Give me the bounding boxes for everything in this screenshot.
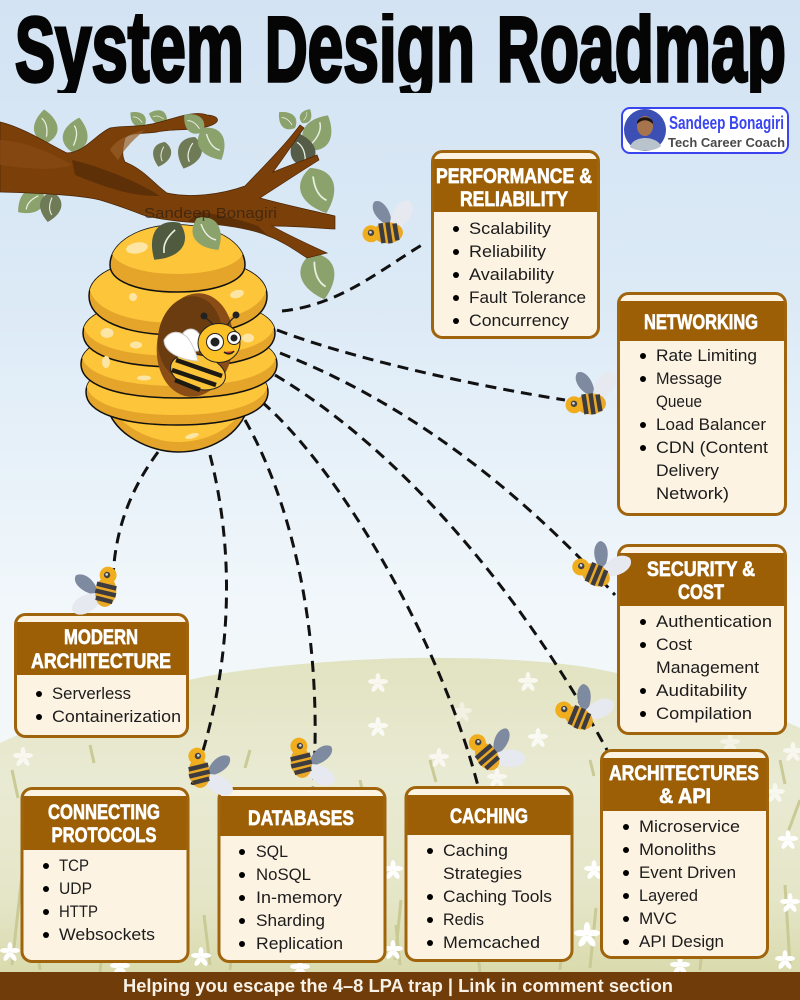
dashed path: caching bbox=[262, 402, 478, 786]
hive entrance bbox=[150, 288, 240, 402]
panel: security & cost: Authentication bbox=[656, 612, 772, 631]
panel: databases: In-memory bbox=[256, 888, 343, 907]
panel: security & cost: Auditability bbox=[656, 681, 748, 700]
bee: modern architecture bbox=[70, 562, 120, 619]
panel: databases: SQL bbox=[256, 842, 288, 861]
panel: performance & reliability: PERFORMANCE & bbox=[436, 165, 592, 188]
panel: security & cost: Management bbox=[656, 658, 759, 677]
panel: architectures & api: MVC bbox=[639, 909, 677, 928]
panel: architectures & api: Layered bbox=[639, 886, 698, 905]
panel: networking: CDN (Content bbox=[656, 438, 768, 457]
bee: caching bbox=[464, 717, 529, 784]
panel: modern architecture: ARCHITECTURE bbox=[31, 650, 171, 673]
panel: performance & reliability: Concurrency bbox=[469, 311, 570, 330]
bee: performance bbox=[361, 199, 415, 245]
panel: networking: NETWORKING bbox=[644, 311, 758, 334]
panel: networking: Delivery bbox=[656, 461, 720, 480]
panel: security & cost: COST bbox=[678, 581, 724, 604]
dashed path: performance bbox=[282, 243, 425, 311]
panel: architectures & api: & API bbox=[659, 785, 711, 808]
badge: Sandeep Bonagiri bbox=[622, 108, 788, 153]
panel: architectures & api: Microservice bbox=[639, 817, 740, 836]
panel: caching: Caching Tools bbox=[443, 887, 552, 906]
panel: caching bbox=[406, 788, 572, 960]
panel: caching: Redis bbox=[443, 910, 484, 929]
panel: connecting protocols: Websockets bbox=[59, 925, 155, 944]
panel: security & cost: SECURITY & bbox=[647, 558, 755, 581]
dashed path: architectures bbox=[275, 375, 607, 750]
panel: connecting protocols: CONNECTING bbox=[48, 801, 160, 824]
panel: caching: Memcached bbox=[443, 933, 540, 952]
panel: modern architecture: Containerization bbox=[52, 707, 181, 726]
panel: connecting protocols: PROTOCOLS bbox=[52, 824, 156, 847]
dashed path: protocols bbox=[190, 455, 227, 790]
panel: performance & reliability bbox=[432, 152, 598, 338]
panel: databases: Replication bbox=[256, 934, 343, 953]
big bee bbox=[164, 312, 240, 396]
bee: databases bbox=[287, 733, 337, 790]
panel: databases: DATABASES bbox=[248, 807, 354, 830]
panel: security & cost bbox=[618, 546, 786, 734]
dashed path: security bbox=[280, 353, 615, 595]
panel: connecting protocols: UDP bbox=[59, 879, 92, 898]
panel: architectures & api: Monoliths bbox=[639, 840, 716, 859]
panel: caching: CACHING bbox=[450, 805, 528, 828]
panel: networking: Load Balancer bbox=[656, 415, 766, 434]
watermark: Sandeep Bonagiri bbox=[144, 206, 277, 222]
panel: connecting protocols: TCP bbox=[59, 856, 89, 875]
tree branch bbox=[0, 113, 335, 258]
panel: performance & reliability: Availability bbox=[469, 265, 555, 284]
panel: performance & reliability: Fault Tolerance bbox=[469, 288, 586, 307]
panel: databases: Sharding bbox=[256, 911, 325, 930]
panel: databases bbox=[219, 788, 385, 962]
bee: networking bbox=[564, 370, 618, 416]
panel: caching: Strategies bbox=[443, 864, 522, 883]
panel: connecting protocols bbox=[22, 788, 188, 962]
panel: performance & reliability: Scalability bbox=[469, 219, 552, 238]
bee: security bbox=[568, 534, 634, 596]
panel: networking bbox=[618, 294, 786, 514]
leaves behind branch bbox=[11, 106, 342, 304]
panel: architectures & api: API Design bbox=[639, 932, 724, 951]
panel: architectures & api: ARCHITECTURES bbox=[609, 762, 759, 785]
panel: modern architecture: MODERN bbox=[64, 626, 138, 649]
beehive bbox=[81, 207, 277, 452]
panel: architectures & api bbox=[602, 750, 768, 958]
footer bar: Helping you escape the 4–8 LPA trap | Link in comment section bbox=[123, 976, 673, 996]
panel: networking: Message bbox=[656, 369, 722, 388]
background: hill and meadow bbox=[0, 658, 800, 1000]
panel: databases: NoSQL bbox=[256, 865, 311, 884]
bee: protocols bbox=[185, 743, 235, 800]
panel: architectures & api: Event Driven bbox=[639, 863, 736, 882]
dashed path: databases bbox=[245, 420, 315, 790]
panel: security & cost: Cost bbox=[656, 635, 692, 654]
panel: networking: Queue bbox=[656, 392, 702, 411]
panel: modern architecture: Serverless bbox=[52, 684, 131, 703]
panel: networking: Network) bbox=[656, 484, 729, 503]
panel: connecting protocols: HTTP bbox=[59, 902, 98, 921]
footer bar bbox=[0, 972, 800, 1000]
panel: caching: Caching bbox=[443, 841, 508, 860]
badge: Sandeep Bonagiri: Tech Career Coach bbox=[668, 136, 785, 150]
panel: networking: Rate Limiting bbox=[656, 346, 757, 365]
panel: performance & reliability: RELIABILITY bbox=[460, 188, 568, 211]
bee: architectures bbox=[551, 677, 617, 739]
panel: performance & reliability: Reliability bbox=[469, 242, 547, 261]
panel: modern architecture bbox=[16, 614, 188, 736]
dashed path: modern architecture bbox=[113, 452, 158, 578]
dashed path: networking bbox=[277, 330, 565, 400]
title bbox=[15, 13, 784, 93]
panel: security & cost: Compilation bbox=[656, 704, 752, 723]
hive leaves bbox=[141, 210, 230, 269]
